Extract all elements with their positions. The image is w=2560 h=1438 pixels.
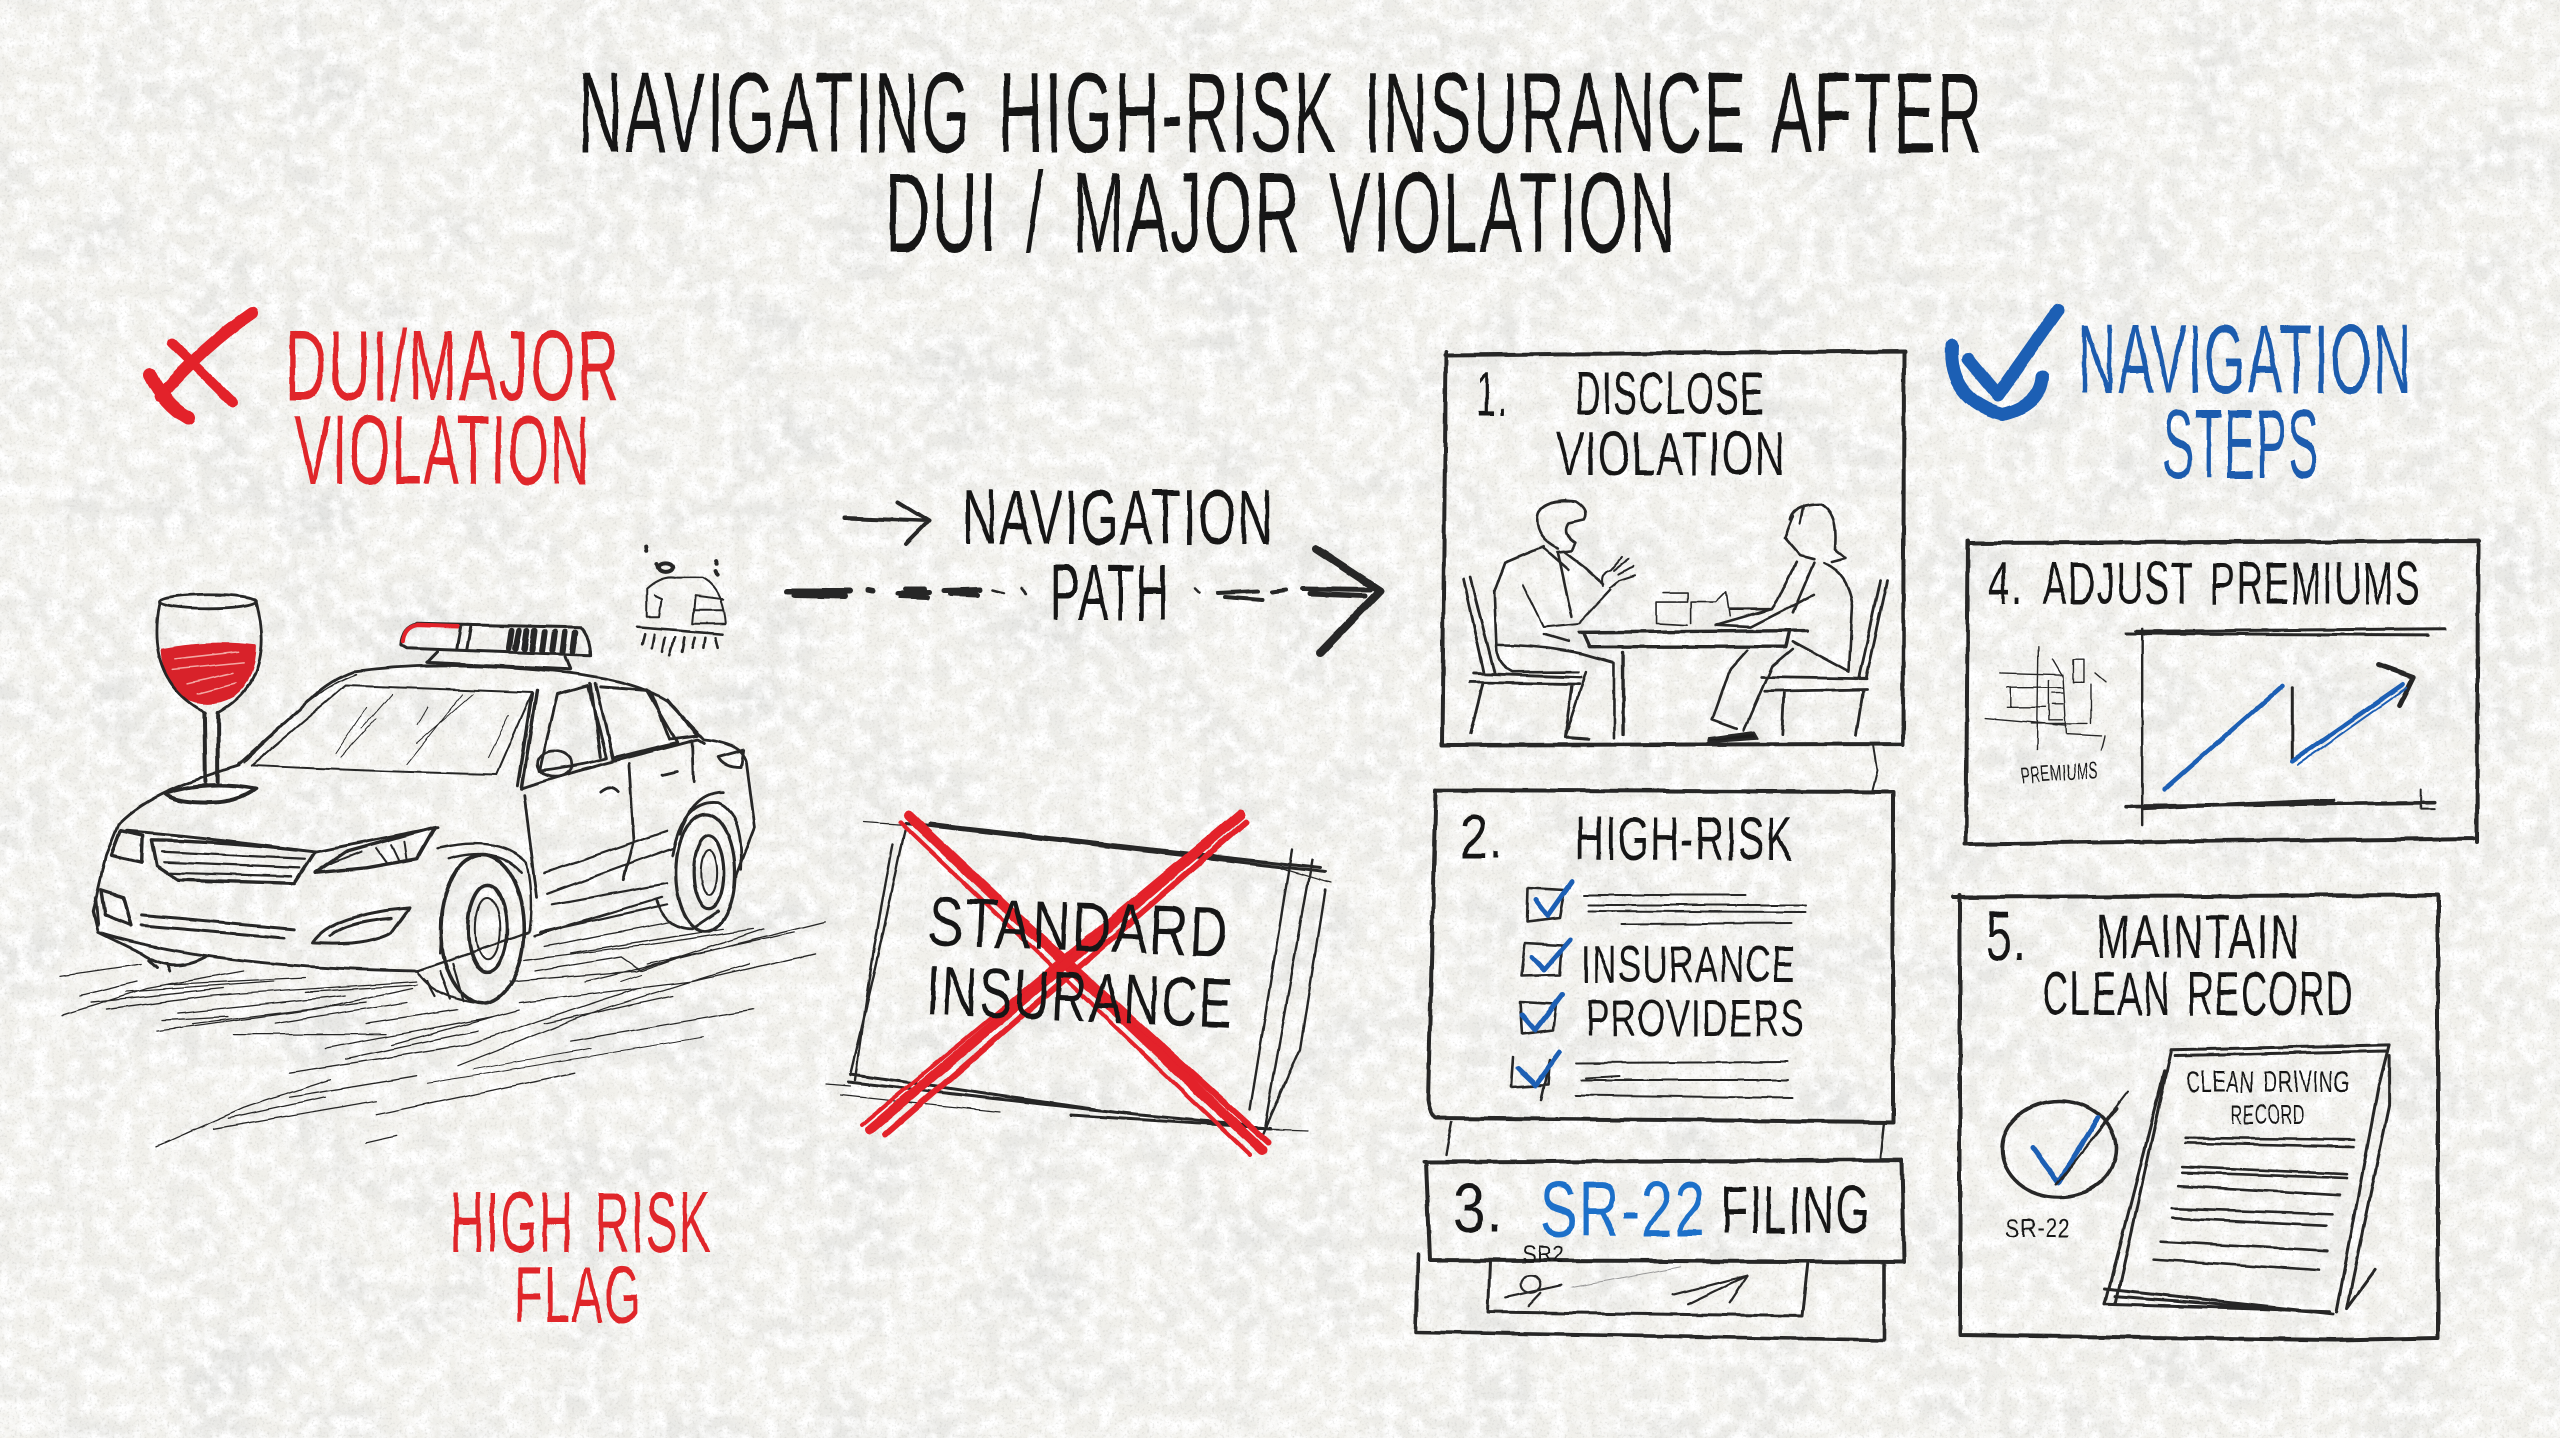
heading: step 5 xyxy=(1986,897,2354,1029)
heading: step 5: MAINTAIN xyxy=(2096,903,2301,972)
icon: small premiums sketch xyxy=(1986,647,2105,750)
sketch box xyxy=(826,822,1330,1135)
illustration: car with wine glass xyxy=(60,594,825,1146)
heading: step 2: 2. xyxy=(1460,800,1505,872)
heading: step 3: FILING xyxy=(1721,1172,1871,1248)
label: navigation path: NAVIGATION xyxy=(962,473,1275,561)
document: clean driving record: RECORD xyxy=(2231,1099,2305,1130)
label: high risk flag xyxy=(450,1175,712,1339)
heading: step 3: 3. xyxy=(1453,1169,1505,1247)
label: navigation path: PATH xyxy=(1050,548,1170,637)
heading: navigation steps xyxy=(1952,304,2413,499)
siren light bar xyxy=(401,624,591,669)
panel 3: SR-22 filing xyxy=(1416,1160,1904,1340)
text: navigation steps: STEPS xyxy=(2163,389,2320,499)
heading: step 1 xyxy=(1476,360,1786,489)
text: navigation steps xyxy=(2078,304,2413,499)
label: high risk flag: HIGH RISK xyxy=(450,1175,712,1271)
title: DUI / MAJOR VIOLATION xyxy=(885,150,1677,277)
panel: standard insurance crossed out xyxy=(826,815,1330,1155)
heading: DUI/major violation xyxy=(285,310,621,505)
heading: step 5: CLEAN RECORD xyxy=(2042,960,2354,1029)
heading: step 3: SR-22 xyxy=(1540,1165,1707,1253)
wine glass xyxy=(156,594,262,803)
document: clean driving record: CLEAN DRIVING xyxy=(2186,1066,2350,1099)
heading: step 3 xyxy=(1453,1165,1871,1253)
heading: DUI/major violation: DUI/MAJOR xyxy=(285,310,621,422)
heading: step 4: 4. xyxy=(1988,550,2024,617)
checklist of providers xyxy=(1511,882,1805,1100)
icon: red cross mark xyxy=(150,313,252,418)
label: standard insurance: INSURANCE xyxy=(924,951,1236,1043)
illustration: two people at a table xyxy=(1463,500,1888,742)
road hatching xyxy=(60,922,825,1146)
heading: step 2: HIGH-RISK xyxy=(1575,805,1794,874)
heading: step 1: DISCLOSE xyxy=(1575,360,1765,427)
icon: red X strike xyxy=(862,815,1268,1155)
arrow: dashed path line xyxy=(788,549,1380,653)
icon: small siren sketch xyxy=(637,547,726,655)
icon: circled check xyxy=(2002,1092,2128,1197)
car body xyxy=(93,665,755,971)
icon: blue check mark xyxy=(1952,310,2058,414)
heading: step 1: 1. xyxy=(1476,360,1509,429)
title xyxy=(578,50,1984,277)
arrow: small pointer xyxy=(845,502,929,544)
label: standard insurance xyxy=(924,882,1236,1043)
panel 1: disclose violation xyxy=(1442,351,1905,745)
heading: DUI/major violation: VIOLATION xyxy=(295,395,591,505)
panel 4: adjust premiums xyxy=(1965,541,2479,844)
signature sketch xyxy=(1505,1267,1747,1306)
label: navigation path xyxy=(962,473,1275,637)
label: premiums: PREMIUMS xyxy=(2020,758,2099,788)
heading: step 5: 5. xyxy=(1986,897,2028,975)
label: SR-22: SR-22 xyxy=(2005,1213,2071,1243)
panel 2: high-risk insurance providers xyxy=(1428,745,1893,1160)
panel 5: maintain clean record xyxy=(1953,895,2438,1340)
heading: step 4 xyxy=(1988,550,2421,617)
text: insurance providers: INSURANCE xyxy=(1581,936,1796,994)
chart: rising premiums xyxy=(2126,629,2445,825)
label: standard insurance: STANDARD xyxy=(926,882,1231,972)
checklist of providers: PROVIDERS xyxy=(1586,990,1805,1048)
arrow: navigation path xyxy=(788,473,1380,653)
document: clean driving record xyxy=(2105,1045,2389,1314)
rear wheel xyxy=(676,814,735,932)
label: high risk flag: FLAG xyxy=(514,1250,642,1339)
front wheel xyxy=(417,855,524,1003)
label: SR2: SR2 xyxy=(1523,1241,1565,1268)
heading: step 1: VIOLATION xyxy=(1556,420,1786,489)
heading: step 2 xyxy=(1460,800,1794,874)
